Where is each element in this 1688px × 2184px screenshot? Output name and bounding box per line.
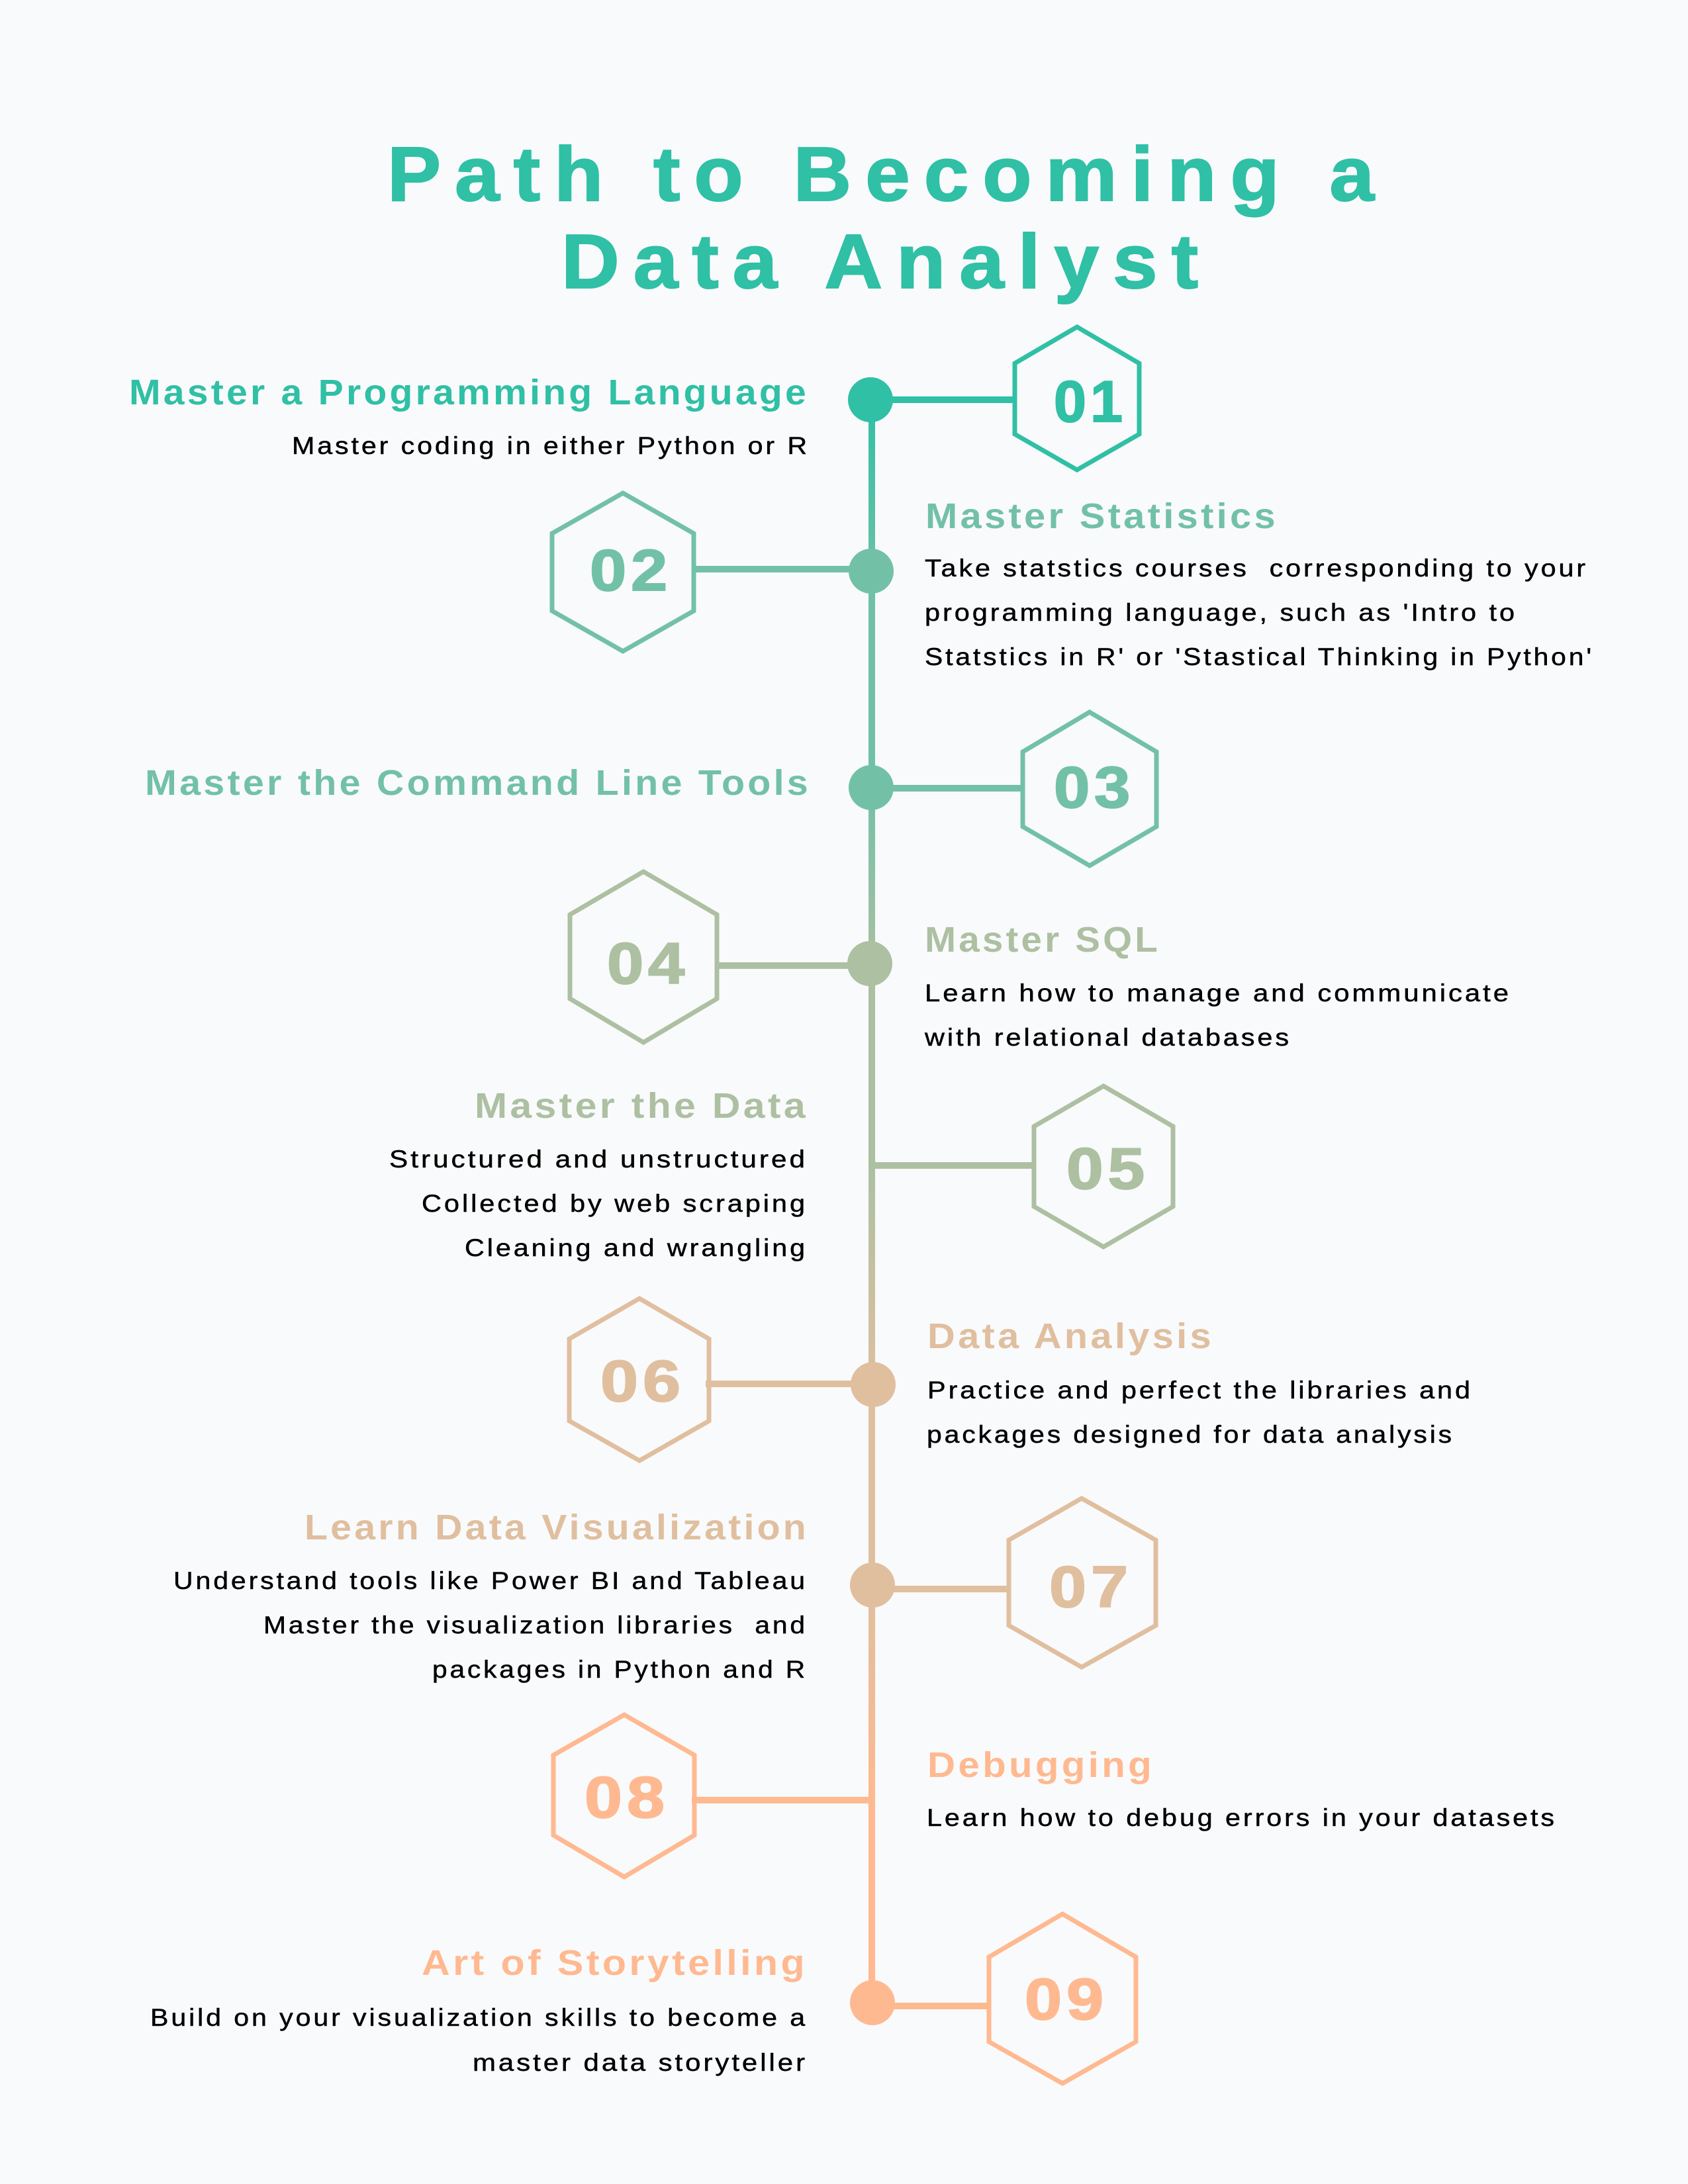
body 02: Statstics in R' or 'Stastical Thinking in Python' — [925, 643, 1594, 670]
timeline spine — [868, 400, 875, 2003]
connector 03 — [887, 785, 1023, 792]
hexagon 02 — [552, 493, 694, 651]
connector 04 — [718, 962, 861, 969]
heading 06: Data Analysis — [927, 1316, 1214, 1356]
hexagon 04 — [570, 872, 717, 1042]
body 06 — [927, 1377, 1473, 1448]
connector 08 — [692, 1797, 872, 1803]
body 05: Cleaning and wrangling — [465, 1234, 808, 1261]
node 04 — [847, 941, 892, 986]
heading 04: Master SQL — [925, 920, 1160, 960]
step 02 — [552, 493, 1594, 670]
body 07 — [173, 1567, 808, 1683]
connector 05 — [872, 1162, 1033, 1169]
number 06: 06 — [600, 1348, 685, 1414]
step 03 — [145, 712, 1156, 866]
number 05: 05 — [1066, 1136, 1149, 1201]
hexagon 01 — [1015, 327, 1139, 470]
connector 06 — [706, 1381, 861, 1387]
body 04: with relational databases — [924, 1024, 1291, 1051]
step 05 — [389, 1086, 1173, 1261]
number 02: 02 — [590, 537, 672, 603]
connector 09 — [887, 2003, 990, 2009]
body 04 — [924, 979, 1511, 1051]
connector 01 — [887, 396, 1014, 403]
body 09: master data storyteller — [473, 2049, 808, 2076]
hexagon 06 — [569, 1298, 709, 1461]
heading 02: Master Statistics — [925, 496, 1278, 536]
body 02: Take statstics courses corresponding to your — [925, 555, 1588, 582]
node 01 — [848, 377, 893, 422]
heading 07: Learn Data Visualization — [305, 1508, 809, 1547]
heading 03: Master the Command Line Tools — [145, 763, 811, 803]
heading 05: Master the Data — [475, 1086, 808, 1126]
step 01 — [129, 327, 1139, 470]
number 07: 07 — [1049, 1554, 1133, 1619]
body 07: Understand tools like Power BI and Tableau — [173, 1567, 808, 1594]
body 07: packages in Python and R — [432, 1656, 808, 1683]
body 05: Structured and unstructured — [389, 1146, 808, 1173]
number 04: 04 — [607, 931, 689, 996]
step 07 — [173, 1498, 1156, 1683]
hexagon 09 — [989, 1914, 1136, 2083]
title: Path to Becoming a — [387, 131, 1388, 217]
number 01: 01 — [1054, 369, 1127, 434]
step 06 — [569, 1298, 1473, 1461]
body 05: Collected by web scraping — [422, 1190, 808, 1217]
body 02 — [925, 555, 1594, 670]
node 09 — [850, 1980, 895, 2025]
hexagon 07 — [1009, 1498, 1156, 1667]
body 09 — [150, 2004, 808, 2076]
heading 09: Art of Storytelling — [422, 1943, 808, 1983]
node 03 — [849, 765, 894, 810]
body 06: Practice and perfect the libraries and — [927, 1377, 1473, 1404]
number 08: 08 — [585, 1764, 669, 1830]
body 05 — [389, 1146, 808, 1261]
hexagon 03 — [1023, 712, 1156, 866]
body 02: programming language, such as 'Intro to — [925, 599, 1517, 626]
title: Data Analyst — [561, 218, 1212, 304]
body 04: Learn how to manage and communicate — [925, 979, 1511, 1007]
step 09 — [150, 1914, 1136, 2083]
number 03: 03 — [1054, 754, 1135, 820]
step 08 — [553, 1715, 1557, 1877]
body 06: packages designed for data analysis — [927, 1421, 1454, 1448]
hexagon 05 — [1034, 1086, 1173, 1247]
connector 02 — [695, 566, 861, 572]
node 02 — [849, 549, 894, 594]
node 07 — [850, 1563, 895, 1608]
hexagon 08 — [553, 1715, 694, 1877]
body 09: Build on your visualization skills to become a — [150, 2004, 808, 2031]
title — [387, 131, 1388, 304]
heading 08: Debugging — [927, 1745, 1154, 1785]
node 06 — [851, 1362, 896, 1407]
body 07: Master the visualization libraries and — [263, 1612, 808, 1639]
number 09: 09 — [1025, 1966, 1108, 2032]
heading 01: Master a Programming Language — [129, 373, 809, 412]
body 08: Learn how to debug errors in your datasets — [927, 1804, 1557, 1831]
step 04 — [570, 872, 1511, 1051]
connector 07 — [887, 1586, 1009, 1592]
body 01: Master coding in either Python or R — [292, 432, 810, 459]
